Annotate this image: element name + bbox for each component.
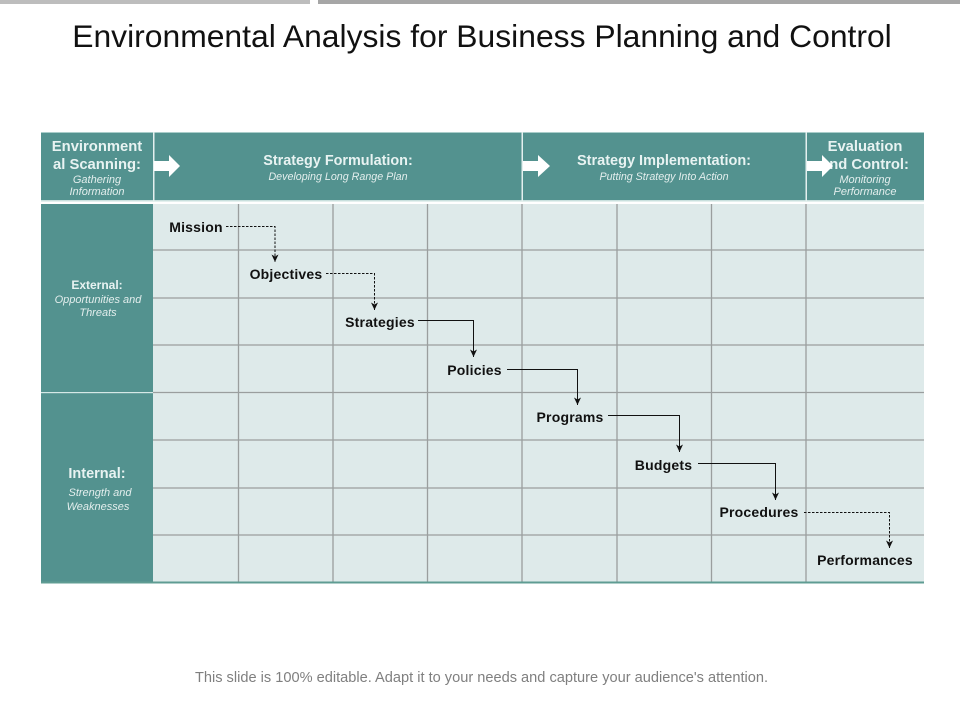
connector: policies to programs	[507, 370, 578, 405]
header: strategy implementation: Putting Strategy Into Action	[599, 171, 729, 183]
header: environmental scanning: al Scanning:	[53, 157, 141, 173]
label: policies: Policies	[447, 362, 502, 378]
header: evaluation and control: and Control:	[821, 157, 909, 173]
label: procedures: Procedures	[719, 504, 799, 520]
label: objectives: Objectives	[250, 266, 322, 282]
panel: internal: Weaknesses	[67, 501, 130, 513]
connector: mission to objectives	[226, 226, 275, 262]
arrow: scanning to formulation	[154, 155, 180, 177]
header: strategy formulation: Developing Long Range Plan	[268, 171, 408, 183]
panel: internal	[41, 393, 153, 583]
header: evaluation and control: Monitoring	[839, 174, 892, 186]
header: evaluation and control	[821, 139, 909, 198]
header: strategy implementation: Strategy Implementation:	[577, 153, 751, 169]
connector: objectives to strategies	[326, 274, 374, 310]
header: environmental scanning: Environment	[52, 139, 142, 155]
connector: budgets to procedures	[698, 464, 776, 500]
panel: external	[41, 204, 153, 392]
arrow: implementation to evaluation	[807, 155, 833, 177]
header: strategy formulation	[263, 153, 413, 183]
header: environmental scanning: Gathering	[73, 174, 122, 186]
title: Environmental Analysis for Business Planning and Control	[72, 18, 892, 54]
connector: strategies to policies	[418, 320, 474, 357]
label: strategies: Strategies	[345, 314, 415, 330]
header band	[41, 132, 924, 202]
header: evaluation and control: Evaluation	[828, 139, 902, 155]
panel: external: Opportunities and	[55, 294, 142, 306]
arrow: formulation to implementation	[523, 155, 550, 177]
connector: programs to budgets	[608, 416, 680, 452]
panel: external: External:	[71, 278, 123, 292]
header: environmental scanning	[52, 139, 142, 198]
grid panel	[41, 204, 924, 584]
connector: procedures to performances	[804, 512, 890, 548]
header: environmental scanning: Information	[69, 186, 125, 198]
label: performances: Performances	[817, 552, 913, 568]
panel: external: Threats	[79, 307, 117, 319]
panel: internal: Internal:	[68, 466, 126, 482]
top accent bars	[0, 0, 960, 4]
header: evaluation and control: Performance	[834, 186, 896, 198]
panel: internal: Strength and	[68, 487, 132, 499]
header: strategy formulation: Strategy Formulation:	[263, 153, 413, 169]
label: programs: Programs	[537, 409, 603, 425]
footer note: This slide is 100% editable. Adapt it to your needs and capture your audience's attention.	[195, 670, 768, 686]
label: budgets: Budgets	[635, 457, 692, 473]
header: strategy implementation	[577, 153, 751, 183]
label: mission: Mission	[169, 219, 223, 235]
